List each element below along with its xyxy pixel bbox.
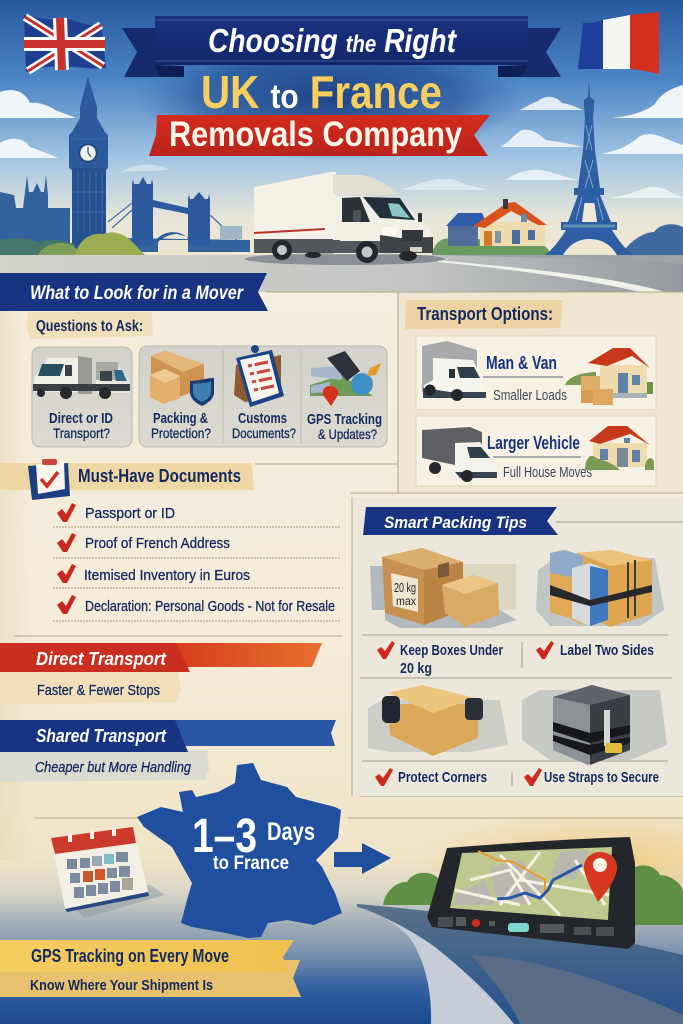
map of France: 1–3 [192,810,257,863]
card: larger vehicle [416,416,656,486]
banner: shared transport: Shared Transport [36,726,167,746]
arrow [334,843,391,874]
bushes [383,865,683,925]
card: three questions: GPS Tracking [307,411,382,428]
icon: grey box and van [422,341,486,401]
calendar days [67,852,133,898]
skyline: Westminster and Big Ben [0,78,108,252]
wheels [272,240,417,263]
banner: GPS tracking [0,940,301,997]
card: direct or ID transport: Transport? [53,425,110,441]
tag: must-have documents: Must-Have Documents [78,466,241,486]
card: three questions: & Updates? [318,426,377,442]
card: larger vehicle: Full House Moves [503,464,592,481]
ground and road [0,815,683,1024]
map of France: to France [213,853,289,874]
tip: protect corners [375,768,487,786]
Eiffel Tower [545,82,633,255]
item: passport: Passport or ID [85,505,175,522]
icon: house [585,426,654,470]
card: three questions: Packing & [153,410,208,427]
item: inventory [57,564,250,584]
tip: label two sides: Label Two Sides [560,642,654,659]
tip: keep boxes under 20 kg [377,641,503,677]
checklist: documents [57,503,335,615]
skyline: Tower Bridge [108,177,250,252]
item: declaration [57,595,335,615]
map of France: Days [267,818,315,846]
trees right [620,224,683,256]
map streets [455,851,609,915]
tip: keep boxes under 20 kg: Keep Boxes Under [400,642,503,659]
device buttons [438,917,614,936]
banner: direct transport: Faster & Fewer Stops [37,682,160,699]
heading line 1: Choosing the Right [208,22,458,59]
card: man and van: Smaller Loads [493,387,567,404]
panel frame lines [13,292,683,818]
card: man and van: Man & Van [486,353,557,373]
card: three questions [139,345,387,447]
tip: keep boxes under 20 kg: 20 kg [400,660,432,677]
banner: direct transport: Direct Transport [36,649,167,669]
image: box with corner protectors [368,685,508,756]
map of France [137,763,342,938]
background: sky [0,0,683,258]
image: boxes 20 kg max: 20 kg [394,580,416,595]
tip: protect corners: Protect Corners [398,769,487,786]
map pin [584,852,617,902]
tag: transport options [405,300,563,329]
panel: transport options [405,300,656,486]
banner: GPS tracking: GPS Tracking on Every Move [31,946,229,966]
clouds [0,85,683,198]
card: direct or ID transport: Direct or ID [49,410,113,427]
item: passport [57,503,175,522]
item: proof of address [57,533,230,552]
card: three questions: Protection? [151,425,211,441]
image: labelled taped boxes [536,550,664,627]
heading line 2: UK to France [201,66,442,118]
trees left [0,232,146,256]
item: inventory: Itemised Inventory in Euros [84,567,250,584]
card: direct or ID transport [32,347,132,447]
tag: transport options: Transport Options: [417,304,553,324]
GPS device [427,837,635,949]
image: boxes 20 kg max: max [396,594,416,608]
title glow [135,36,525,160]
card: larger vehicle: Larger Vehicle [487,433,580,453]
heading line 3: Removals Company [169,115,462,154]
card: three questions: Documents? [232,425,296,441]
section banner: what to look for [0,273,268,311]
banner: GPS tracking: Know Where Your Shipment Is [30,977,213,994]
background: paper [0,285,683,885]
icon: clock face [80,144,96,162]
banner: smart packing tips [363,507,558,535]
icon: clipboard check [28,459,70,500]
icon: two trucks [33,356,130,399]
banner: shared transport [0,720,336,782]
icon: calendar [51,827,165,918]
icon: boxes and shield [150,351,214,406]
banner: direct transport [0,643,322,705]
image: strapped appliance [522,685,667,765]
tag: questions to ask [26,312,153,339]
icon: larger truck [422,427,497,482]
banner: smart packing tips: Smart Packing Tips [384,513,527,532]
icon: GPS map [310,351,381,406]
icon: house and boxes [565,348,653,405]
tip: label two sides [536,641,654,659]
icon: customs clipboard [234,345,284,407]
tag: must-have documents [0,459,254,500]
flag: France [578,12,659,74]
flag: UK [24,15,106,72]
section banner: what to look for: What to Look for in a Mover [30,283,244,304]
red banner [149,115,490,156]
panel: smart packing tips [353,498,683,796]
card: man and van [416,336,656,410]
card: three questions: Customs [238,410,287,427]
item: proof of address: Proof of French Address [85,535,230,552]
image: boxes 20 kg max [370,548,517,628]
tag: questions to ask: Questions to Ask: [36,318,143,335]
hero truck [245,172,445,265]
road [0,255,683,292]
banner: shared transport: Cheaper but More Handling [35,759,192,776]
house and trees centre right [432,199,552,256]
map blocks [453,850,590,905]
item: declaration: Declaration: Personal Goods - Not for Resale [85,598,335,615]
title ribbon [122,16,561,77]
tip: use straps to secure [524,768,659,786]
